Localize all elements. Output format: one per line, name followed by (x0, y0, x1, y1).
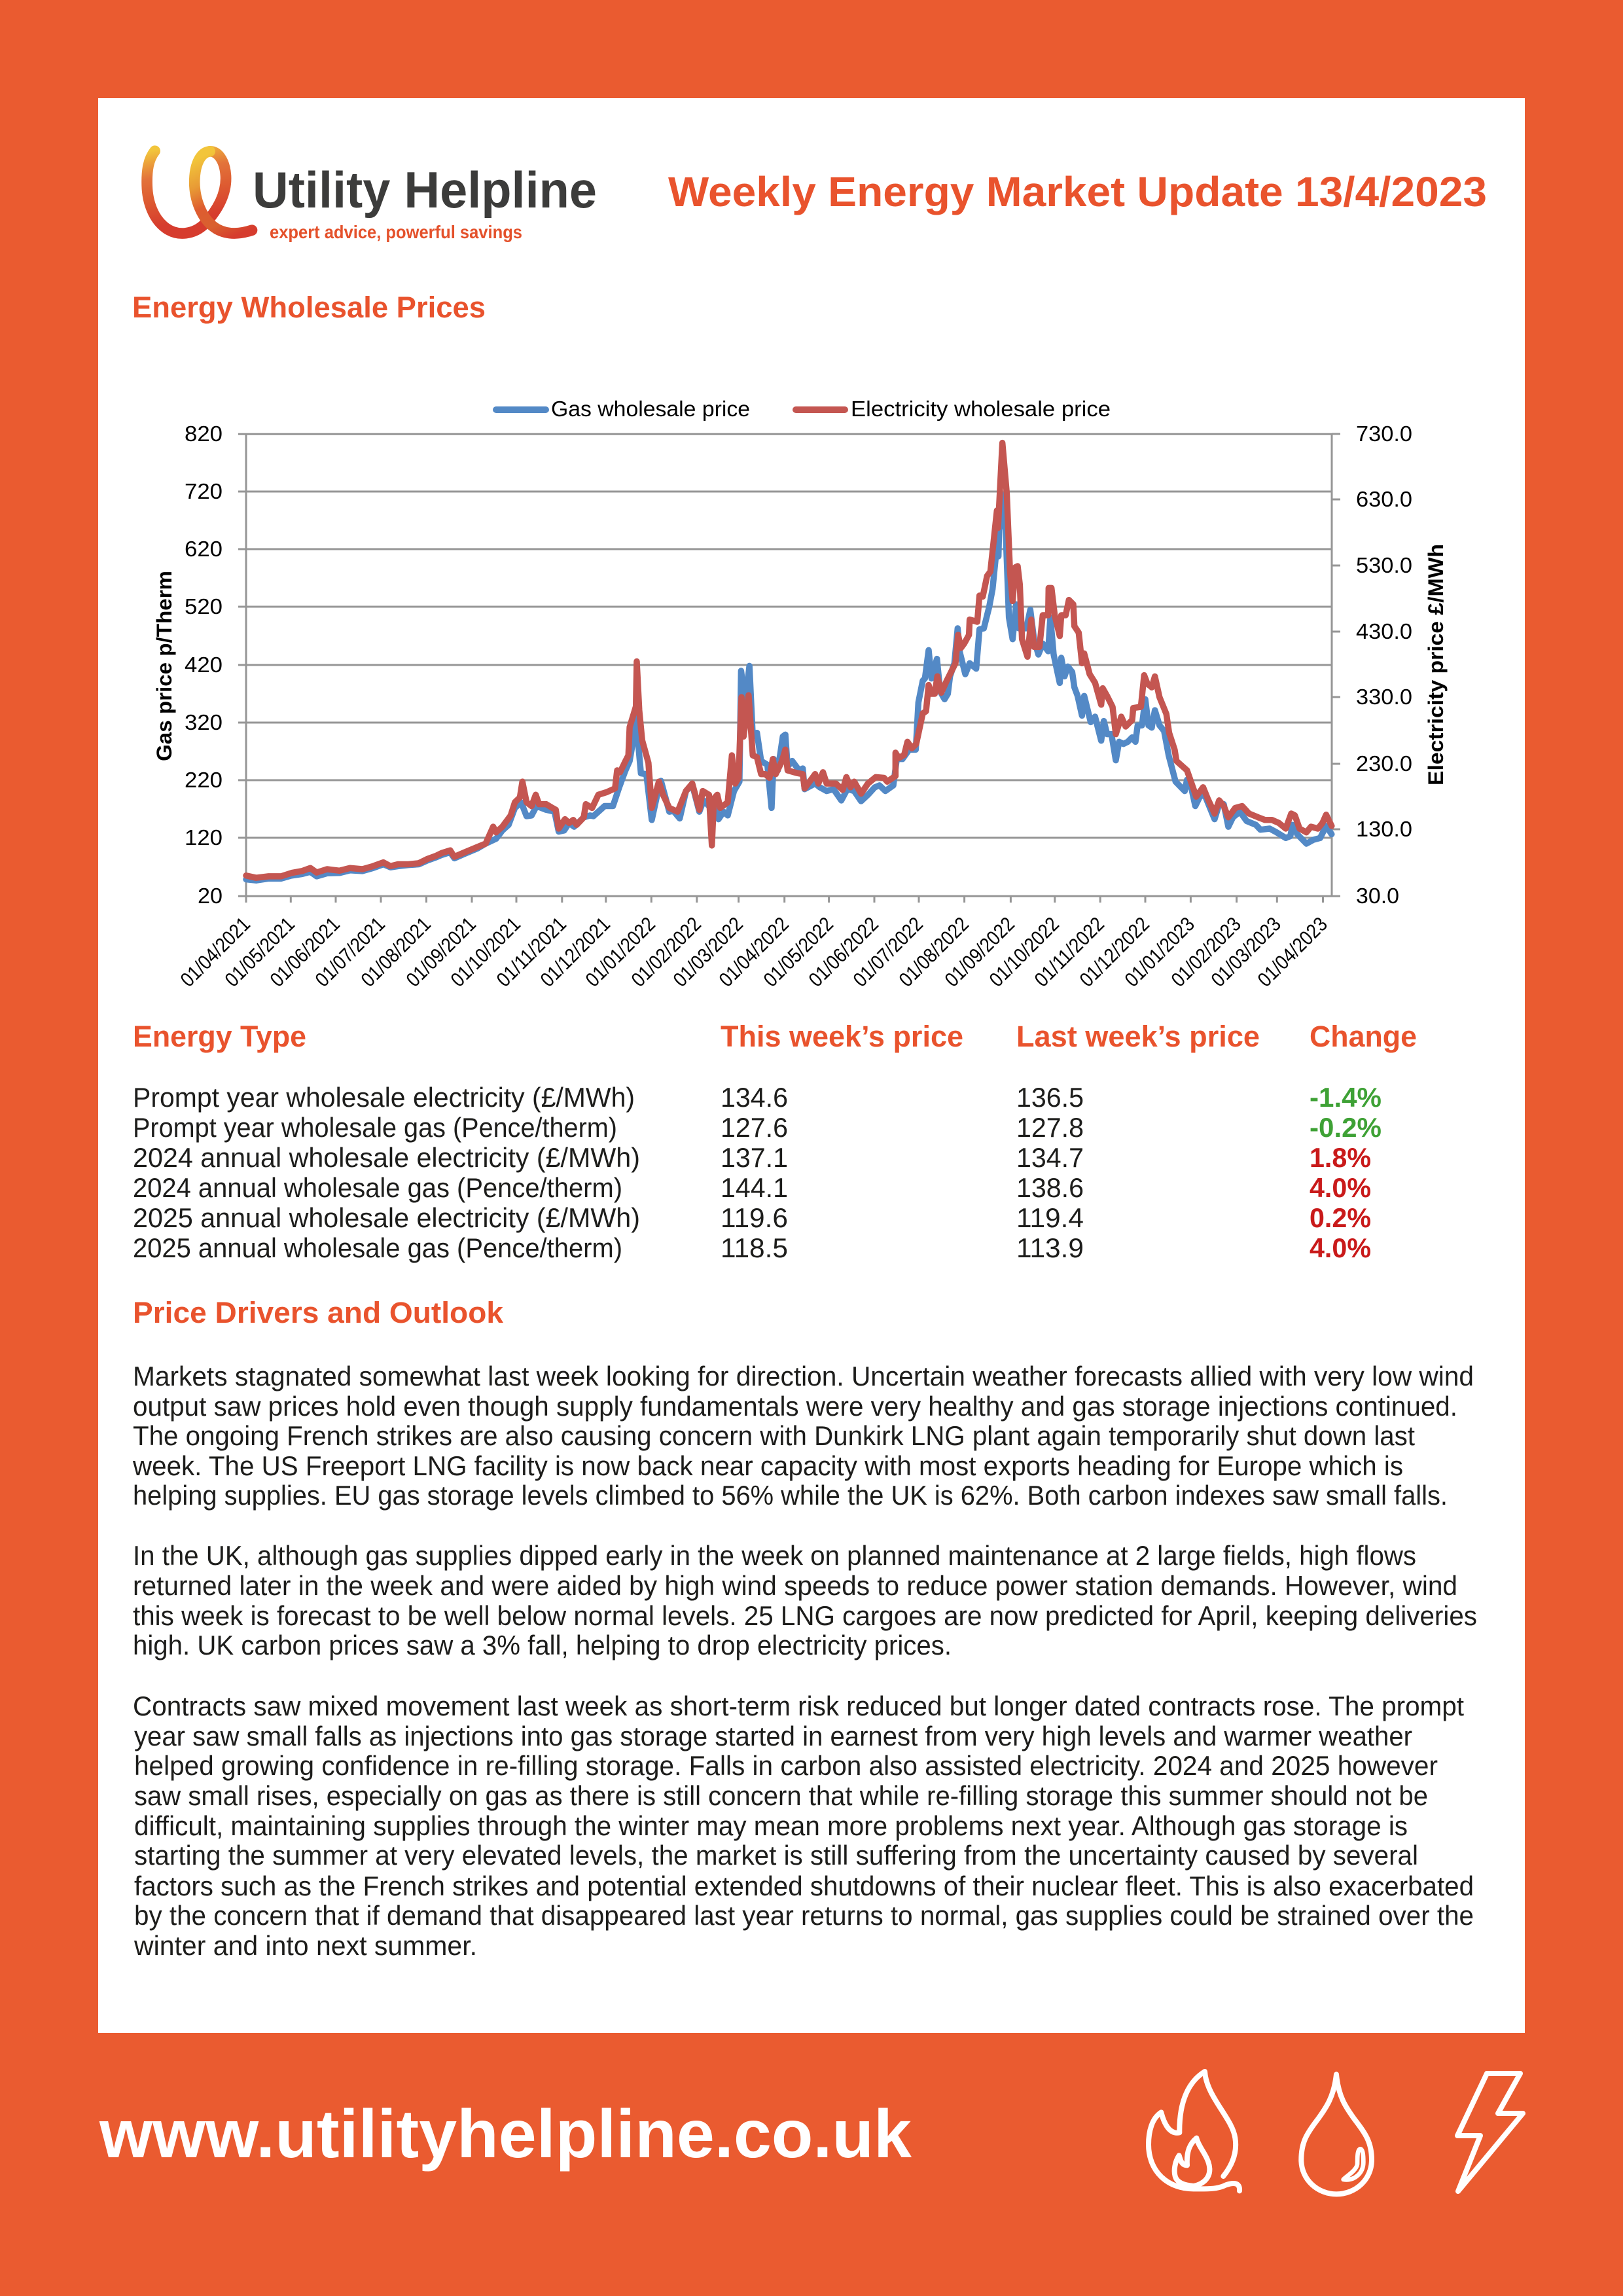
row: 2024 gas: 138.6 (1016, 1172, 1084, 1203)
row: 2025 electricity (133, 1202, 1371, 1233)
date axis labels: 01/03/2022 (669, 912, 747, 991)
heading: Price Drivers and Outlook: Price Drivers and Outlook (133, 1296, 504, 1329)
right axis labels: 30.0 (1356, 884, 1399, 908)
icon: water drop (1301, 2074, 1372, 2194)
icon: flame (1149, 2072, 1240, 2191)
table header: Last week’s price (1016, 1020, 1260, 1053)
row: 2025 electricity: 119.4 (1016, 1202, 1084, 1233)
right axis labels: 730.0 (1356, 422, 1412, 446)
text block: market overview: helping supplies. EU gas storage levels climbed to 56% while the UK is 62%. Both carbon indexes saw small falls. (133, 1480, 1448, 1511)
right axis labels: 430.0 (1356, 619, 1412, 643)
date axis labels: 01/04/2022 (715, 912, 793, 991)
row: 2025 gas (133, 1232, 1371, 1263)
row: prompt year electricity: -1.4% (1310, 1082, 1382, 1113)
text block: UK outlook: this week is forecast to be well below normal levels. 25 LNG cargoes are now predicted for April, keeping deliveries (133, 1600, 1477, 1631)
date axis labels: 01/12/2021 (536, 912, 615, 991)
left axis labels: 220 (185, 768, 223, 792)
text block: market overview: The ongoing French strikes are also causing concern with Dunkirk LNG plant again temporarily shut down last (133, 1420, 1415, 1451)
date axis labels: 01/03/2023 (1207, 912, 1285, 991)
footer website: www.utilityhelpline.co.uk (99, 2096, 912, 2172)
right axis title: Electricity price £/MWh (1424, 544, 1448, 785)
date axis labels: 01/01/2022 (581, 912, 660, 991)
row: prompt year gas: 127.6 (721, 1112, 788, 1143)
row: prompt year gas (133, 1112, 1382, 1143)
left axis labels: 720 (185, 479, 223, 503)
date axis labels: 01/07/2021 (311, 912, 389, 991)
date axis labels: 01/05/2022 (759, 912, 838, 991)
text block: market overview: output saw prices hold even though supply fundamentals were very healthy and gas storage injections continued. (133, 1391, 1457, 1422)
text block: contracts outlook: year saw small falls as injections into gas storage started in earnest from very high levels and warmer weather (134, 1721, 1412, 1751)
table header (133, 1020, 1417, 1053)
date axis labels: 01/10/2022 (985, 912, 1063, 991)
table: energy prices (133, 1020, 1417, 1263)
date axis labels: 01/12/2022 (1075, 912, 1154, 991)
row: 2024 electricity: 2024 annual wholesale electricity (£/MWh) (133, 1142, 640, 1173)
row: prompt year electricity: 136.5 (1016, 1082, 1084, 1113)
date axis labels: 01/08/2022 (895, 912, 973, 991)
date axis labels: 01/04/2023 (1253, 912, 1332, 991)
row: 2024 electricity: 134.7 (1016, 1142, 1084, 1173)
row: prompt year electricity (133, 1082, 1382, 1113)
right axis labels (1356, 422, 1412, 908)
text block: market overview (132, 1361, 1474, 1511)
left axis labels: 520 (185, 594, 223, 619)
row: 2025 gas: 2025 annual wholesale gas (Pence/therm) (133, 1232, 622, 1263)
date axis labels: 01/09/2021 (402, 912, 480, 991)
date axis labels: 01/11/2022 (1030, 912, 1109, 991)
right axis labels: 530.0 (1356, 553, 1412, 577)
row: prompt year electricity: 134.6 (721, 1082, 788, 1113)
row: 2024 gas: 144.1 (721, 1172, 788, 1203)
row: 2025 gas: 113.9 (1016, 1232, 1084, 1263)
row: 2025 electricity: 2025 annual wholesale electricity (£/MWh) (133, 1202, 640, 1233)
text block: contracts outlook: winter and into next summer. (134, 1930, 477, 1961)
date axis labels: 01/09/2022 (940, 912, 1019, 991)
chart legend: Electricity wholesale price (851, 397, 1111, 421)
right axis labels: 230.0 (1356, 751, 1412, 776)
text block: UK outlook: In the UK, although gas supplies dipped early in the week on planned maintenance at 2 large fields, high flows (133, 1540, 1416, 1571)
series: gas wholesale price (blue) (246, 495, 1332, 880)
chart gridlines and axes (238, 434, 1340, 903)
date axis labels: 01/06/2022 (804, 912, 883, 991)
date axis labels: 01/06/2021 (266, 912, 344, 991)
date axis labels: 01/02/2022 (627, 912, 705, 991)
left axis labels: 320 (185, 710, 223, 734)
right axis labels: 330.0 (1356, 685, 1412, 709)
row: prompt year gas: Prompt year wholesale gas (Pence/therm) (133, 1112, 617, 1143)
table header: Change (1310, 1020, 1417, 1053)
date axis labels: 01/11/2021 (492, 912, 571, 991)
table header: This week’s price (721, 1020, 963, 1053)
line chart: gas and electricity wholesale prices (152, 397, 1448, 991)
series: electricity wholesale price (red) (246, 443, 1332, 878)
text block: market overview: Markets stagnated somewhat last week looking for direction. Uncertain weather forecasts allied with very low wind (133, 1361, 1474, 1391)
left axis labels: 820 (185, 422, 223, 446)
text block: UK outlook: high. UK carbon prices saw a 3% fall, helping to drop electricity prices. (133, 1630, 952, 1660)
text block: contracts outlook: factors such as the French strikes and potential extended shutdowns of their nuclear fleet. This is also exacerbated (134, 1871, 1474, 1901)
left axis labels: 20 (198, 884, 223, 908)
icon: logo ribbon (147, 151, 252, 234)
heading: Energy Wholesale Prices: Energy Wholesale Prices (132, 291, 486, 324)
text block: contracts outlook: difficult, maintaining supplies through the winter may mean more problems next year. Although gas storage is (134, 1810, 1408, 1841)
text block: contracts outlook: starting the summer at very elevated levels, the market is still suffering from the uncertainty caused by several (134, 1840, 1418, 1871)
row: prompt year gas: 127.8 (1016, 1112, 1084, 1143)
date axis labels: 01/07/2022 (849, 912, 927, 991)
row: 2024 gas: 4.0% (1310, 1172, 1371, 1203)
left axis labels: 120 (185, 825, 223, 850)
date axis labels: 01/01/2023 (1120, 912, 1199, 991)
white content panel (98, 98, 1525, 2033)
left axis labels: 620 (185, 537, 223, 561)
row: prompt year electricity: Prompt year wholesale electricity (£/MWh) (133, 1082, 635, 1113)
text block: UK outlook (133, 1540, 1477, 1660)
row: 2024 electricity (133, 1142, 1371, 1173)
left axis labels (185, 422, 223, 908)
left axis title: Gas price p/Therm (152, 571, 176, 761)
text block: market overview: week. The US Freeport LNG facility is now back near capacity with most exports heading for Europe which is (132, 1450, 1403, 1481)
text block: contracts outlook: by the concern that if demand that disappeared last year returns to normal, gas supplies could be strained over the (134, 1900, 1474, 1931)
date axis labels (176, 912, 1332, 991)
logo: Utility Helpline (147, 151, 597, 242)
left axis labels: 420 (185, 653, 223, 677)
row: 2025 electricity: 0.2% (1310, 1202, 1371, 1233)
row: 2025 electricity: 119.6 (721, 1202, 788, 1233)
row: 2024 electricity: 137.1 (721, 1142, 788, 1173)
row: prompt year gas: -0.2% (1310, 1112, 1382, 1143)
table header: Energy Type (133, 1020, 306, 1053)
row: 2024 electricity: 1.8% (1310, 1142, 1371, 1173)
text block: contracts outlook: Contracts saw mixed movement last week as short-term risk reduced but longer dated contracts rose. The prompt (133, 1691, 1464, 1721)
right axis labels: 130.0 (1356, 817, 1412, 841)
chart legend (496, 397, 1111, 421)
date axis labels: 01/05/2021 (221, 912, 299, 991)
right axis labels: 630.0 (1356, 487, 1412, 511)
logo wordmark: Utility Helpline (253, 161, 597, 219)
row: 2025 gas: 118.5 (721, 1232, 788, 1263)
text block: contracts outlook: helped growing confidence in re-filling storage. Falls in carbon also assisted electricity. 2024 and 2025 however (134, 1750, 1438, 1781)
row: 2024 gas (133, 1172, 1371, 1203)
icon: lightning bolt (1457, 2073, 1523, 2191)
text block: contracts outlook (133, 1691, 1474, 1961)
text block: UK outlook: returned later in the week and were aided by high wind speeds to reduce power station demands. However, wind (133, 1570, 1457, 1601)
text block: contracts outlook: saw small rises, especially on gas as there is still concern that while re-filling storage this summer should not be (134, 1780, 1428, 1811)
date axis labels: 01/02/2023 (1167, 912, 1245, 991)
logo tagline: expert advice, powerful savings (270, 222, 522, 242)
title: Weekly Energy Market Update 13/4/2023 (668, 168, 1487, 215)
date axis labels: 01/08/2021 (357, 912, 435, 991)
chart legend: Gas wholesale price (551, 397, 750, 421)
row: 2024 gas: 2024 annual wholesale gas (Pence/therm) (133, 1172, 622, 1203)
date axis labels: 01/10/2021 (446, 912, 525, 991)
row: 2025 gas: 4.0% (1310, 1232, 1371, 1263)
date axis labels: 01/04/2021 (176, 912, 255, 991)
